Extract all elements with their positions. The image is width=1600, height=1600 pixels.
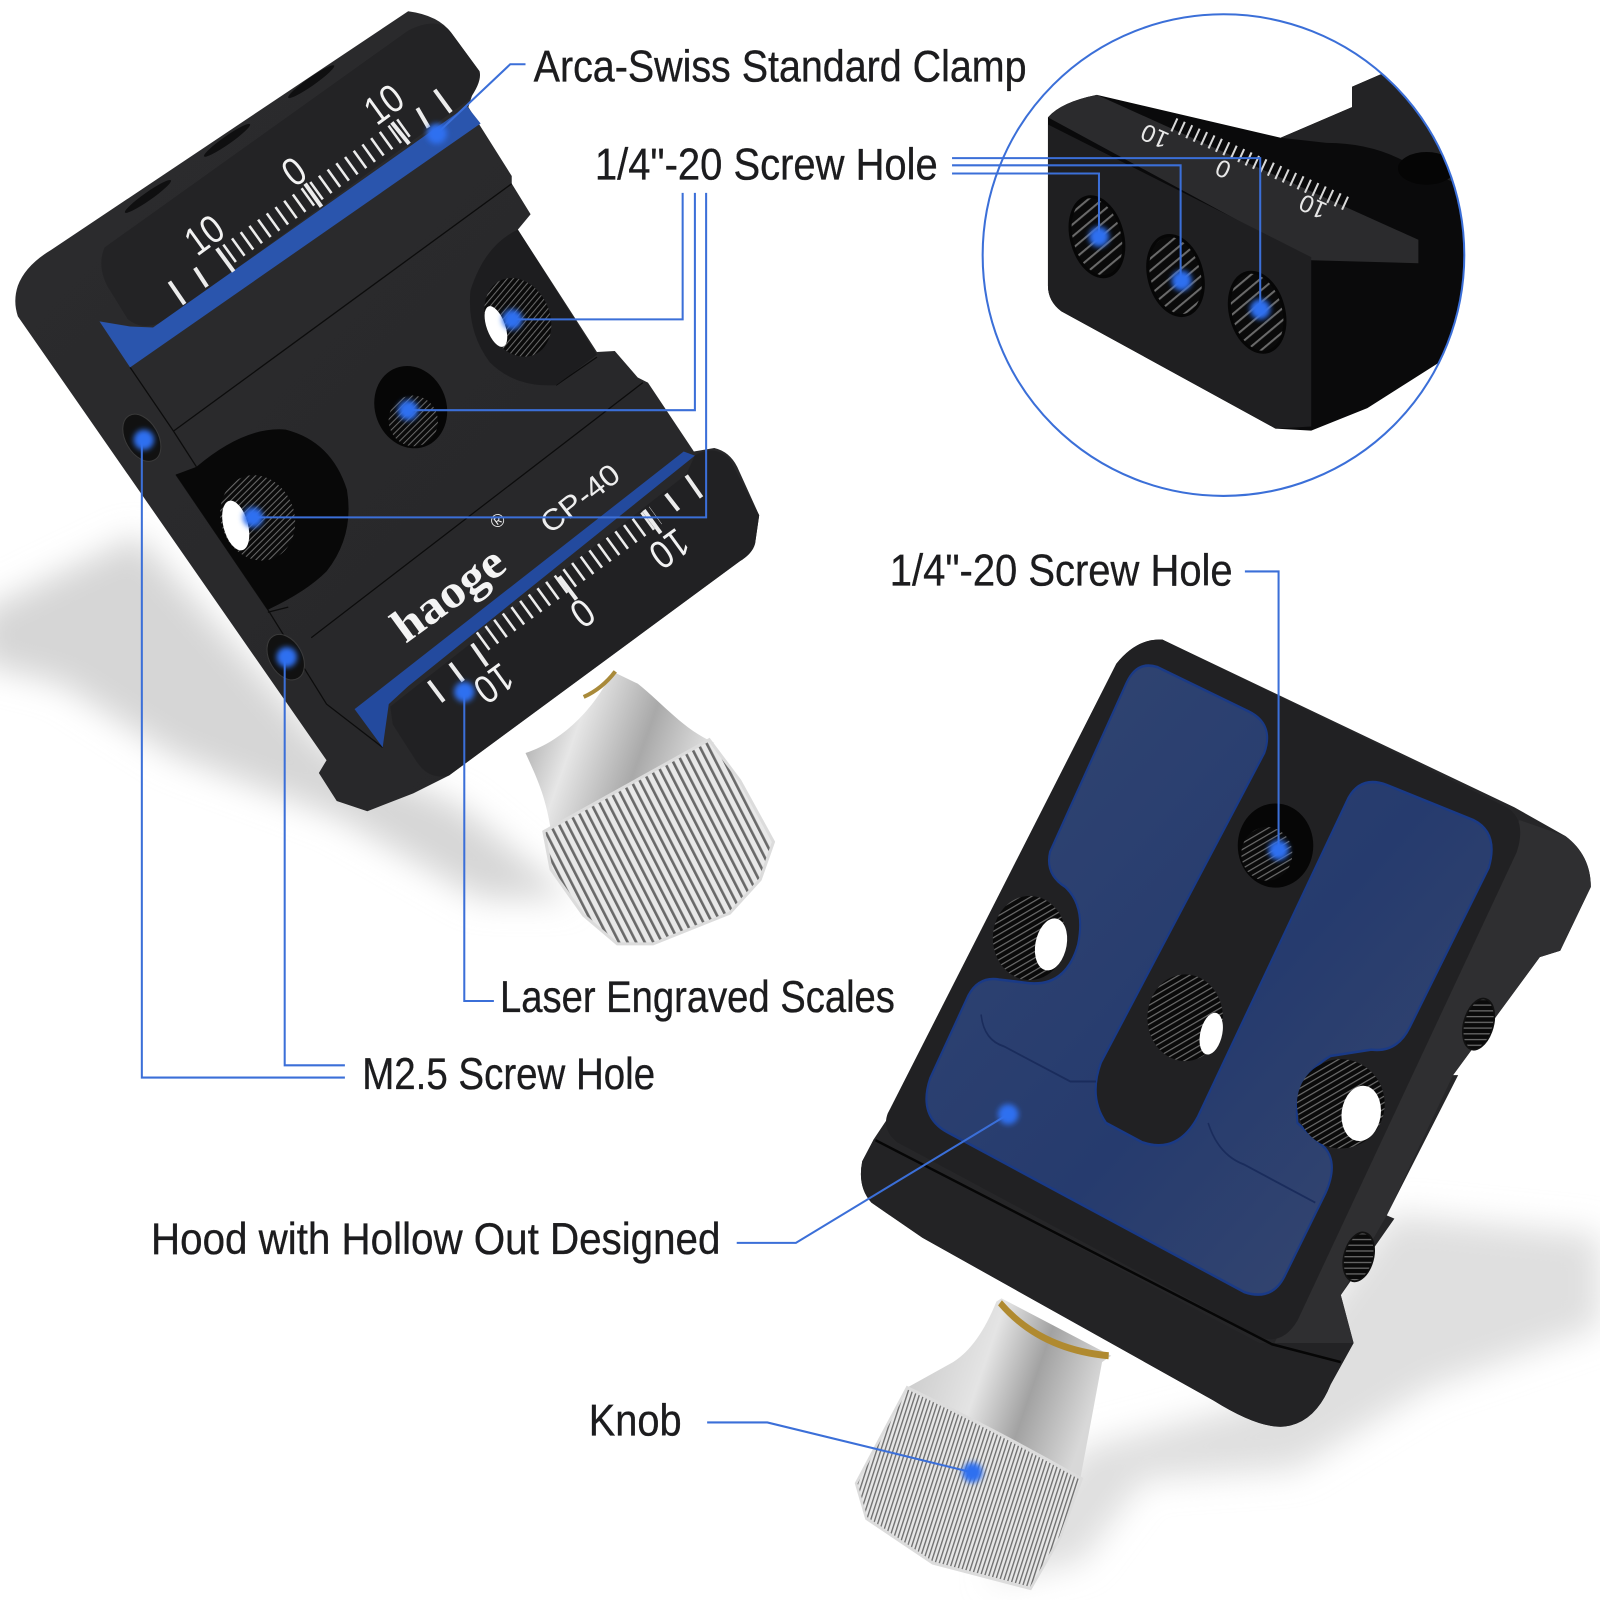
label: 1/4"-20 Screw Hole bbox=[890, 545, 1233, 596]
hole: center threaded bbox=[1147, 974, 1227, 1061]
lower scale ticks bbox=[429, 476, 702, 702]
upper scale numbers: 10 bbox=[356, 75, 412, 133]
side hole: M2.5 upper bbox=[115, 407, 169, 468]
hole: right recess bbox=[470, 230, 597, 385]
leader bbox=[1245, 571, 1279, 850]
right side face bbox=[1274, 820, 1591, 1343]
leaders bbox=[142, 440, 345, 1078]
lower scale plate bbox=[390, 451, 759, 777]
top face bbox=[1048, 95, 1418, 263]
hollow pocket bbox=[926, 666, 1492, 1295]
knob neck bbox=[526, 671, 714, 832]
scale numbers: 0 bbox=[1212, 153, 1235, 183]
clamp body bbox=[861, 639, 1591, 1427]
scale numbers: 10 bbox=[1295, 188, 1331, 224]
callout: Arca-Swiss Standard Clamp bbox=[437, 41, 1027, 134]
registered mark: ® bbox=[486, 508, 510, 533]
label: Hood with Hollow Out Designed bbox=[151, 1213, 720, 1264]
callout: M2.5 Screw Hole bbox=[142, 440, 655, 1099]
side hole upper bbox=[1457, 992, 1501, 1056]
callout: Laser Engraved Scales bbox=[464, 692, 895, 1022]
label: Knob bbox=[589, 1395, 682, 1446]
label: Arca-Swiss Standard Clamp bbox=[534, 41, 1027, 92]
plate seams bbox=[130, 184, 643, 747]
callout: top 1/4"-20 Screw Hole bbox=[253, 139, 938, 517]
hole: right threaded bbox=[1297, 1059, 1387, 1148]
callout: Hood with Hollow Out Designed bbox=[151, 1114, 1008, 1264]
jaw seam bbox=[876, 1140, 1341, 1362]
hole: top threaded bbox=[1238, 803, 1313, 888]
scale numbers bbox=[1142, 125, 1327, 218]
side hole: M2.5 lower bbox=[259, 628, 312, 687]
lower scale numbers bbox=[465, 520, 697, 712]
knob: upper clamp bbox=[526, 671, 773, 944]
circular detail inset bbox=[983, 14, 1480, 496]
lower scale numbers: 10 bbox=[641, 520, 697, 578]
knurled grip bbox=[856, 1388, 1082, 1589]
leader bbox=[464, 692, 494, 1001]
shadow: upper clamp bbox=[0, 536, 571, 898]
blue band: lower bbox=[355, 452, 695, 747]
knob neck bbox=[907, 1298, 1111, 1477]
scale ticks bbox=[1173, 124, 1347, 204]
leader bbox=[737, 1114, 1008, 1243]
hole: middle threaded bbox=[363, 356, 459, 459]
scale numbers: 10 bbox=[1137, 118, 1173, 153]
knob brass ring bbox=[1000, 1303, 1109, 1356]
side recesses on top edge bbox=[123, 62, 337, 216]
front face bbox=[1048, 124, 1311, 429]
inset ring bbox=[983, 14, 1464, 496]
label: Laser Engraved Scales bbox=[500, 971, 895, 1022]
product: lower clamp bbox=[861, 639, 1591, 1427]
upper scale numbers bbox=[176, 75, 412, 264]
side hole lower bbox=[1337, 1226, 1380, 1288]
knob: lower clamp bbox=[856, 1298, 1111, 1589]
product: upper clamp bbox=[15, 11, 759, 811]
upper scale numbers: 0 bbox=[274, 148, 315, 195]
lower scale numbers: 0 bbox=[562, 590, 603, 636]
upper scale ticks bbox=[169, 90, 451, 304]
clamp body bbox=[15, 11, 759, 811]
leaders bbox=[253, 193, 706, 517]
lower scale numbers: 10 bbox=[465, 654, 522, 712]
hole: left threaded bbox=[993, 896, 1073, 980]
callout: lower 1/4"-20 Screw Hole bbox=[890, 545, 1279, 850]
cut-out hole bbox=[1402, 152, 1450, 180]
inset hole middle bbox=[1146, 234, 1205, 317]
callout: Knob bbox=[589, 1395, 972, 1472]
blue marker dots bbox=[134, 123, 1289, 1483]
leader bbox=[437, 64, 526, 134]
leader bbox=[707, 1422, 972, 1472]
bottom jaw bbox=[861, 1139, 1354, 1427]
block body bbox=[1048, 73, 1480, 431]
model number: CP-40 bbox=[534, 458, 627, 540]
shadow: lower clamp bbox=[990, 1214, 1600, 1582]
label: M2.5 Screw Hole bbox=[362, 1048, 655, 1099]
upper scale plate bbox=[101, 24, 480, 326]
top cut-out bbox=[1280, 74, 1452, 182]
inset hole right bbox=[1228, 270, 1286, 354]
plate top surface bbox=[886, 639, 1520, 1339]
hole: right threaded bbox=[472, 267, 564, 368]
knob brass ring bbox=[584, 671, 615, 697]
upper scale numbers: 10 bbox=[176, 206, 233, 264]
brand logo: haoge bbox=[382, 536, 515, 653]
blue band: upper bbox=[99, 106, 481, 367]
callout: inset leaders bbox=[952, 158, 1260, 309]
inset hole left bbox=[1068, 195, 1126, 278]
counterbore recess bbox=[176, 429, 349, 610]
inset content bbox=[1048, 73, 1480, 431]
hole: lower threaded bbox=[208, 465, 307, 571]
knurled grip bbox=[544, 740, 773, 944]
label: 1/4"-20 Screw Hole bbox=[595, 139, 938, 190]
pocket step lines bbox=[981, 1015, 1315, 1203]
